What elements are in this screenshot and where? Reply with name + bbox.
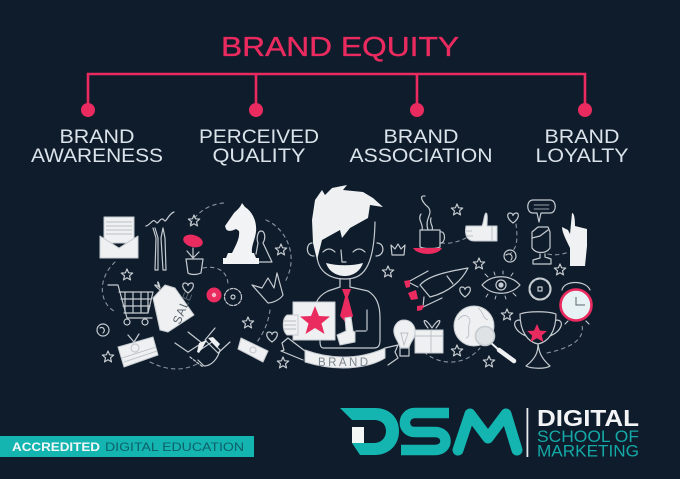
logo wordmark: SCHOOL OF [537,428,639,446]
logo: DSM [340,405,639,460]
dashed connectors [102,203,582,369]
icon: handshake [175,328,230,367]
label: brand loyalty: BRAND [544,127,620,148]
man left hand [283,315,298,335]
logo divider [526,408,528,457]
label: brand association [350,127,492,167]
icon: coffee cup [413,196,444,254]
icon: eye [482,271,520,299]
label: brand awareness [31,127,163,167]
icon: person bust [532,227,551,264]
logo wordmark: MARKETING [537,442,639,460]
icon: envelope [100,217,138,258]
icon: light bulb [394,320,415,356]
logo wordmark [537,405,639,460]
banner: accredited digital education [0,436,254,457]
man head [307,222,383,279]
label: brand association: BRAND [384,127,458,148]
label: brand association: ASSOCIATION [350,146,492,167]
icon: sale tag [153,282,195,332]
icon: money stack [118,334,158,367]
label: perceived quality: PERCEIVED [199,127,319,148]
icon: banknote [238,338,268,362]
man hair [312,185,383,260]
label: brand awareness: AWARENESS [31,146,163,167]
brand card [293,302,335,340]
icon: chess knight [223,203,272,264]
logo white notch [352,427,364,443]
icon: small ball [504,250,516,262]
banner: accredited digital education: ACCREDITED [12,440,100,454]
icon: small coin [97,324,109,336]
man tie [340,289,353,324]
icon: shopping cart [108,285,153,325]
banner: accredited digital education: DIGITAL EDUCATION [105,440,244,454]
logo letter D [340,408,399,455]
label: brand awareness: BRAND [60,127,134,148]
brand ribbon: BRAND [318,357,368,369]
small hearts [183,213,518,342]
title: BRAND EQUITY [221,31,459,62]
icon: flower pot [182,233,204,274]
man body [316,279,380,348]
brand ribbon [281,338,398,369]
label: perceived quality: QUALITY [212,146,306,167]
icon: speech bubble [528,200,555,222]
icon: alarm clock [560,282,592,324]
tree connector [81,74,592,117]
label: perceived quality [199,127,319,167]
icon: crown [252,273,283,303]
logo wordmark: DIGITAL [537,405,639,431]
label: brand loyalty [536,127,629,167]
logo letter S [401,413,449,450]
man mouth [326,263,363,276]
icon: globe and magnifier [454,306,514,361]
icon: sale tag: SALE [170,289,195,326]
icon: small crown [391,244,405,255]
icon: pointing hand [562,213,587,266]
icon: logo brushes [146,212,174,270]
logo letter M [458,414,517,450]
man thumb up [337,317,355,345]
icon: trophy [515,312,561,368]
icon: gift box [415,320,443,353]
icon: thumbs up [465,213,497,241]
label: brand loyalty: LOYALTY [536,146,629,167]
icon: rocket [404,268,468,311]
icon: gear [530,278,550,300]
small stars [102,204,566,368]
figure: brand man [281,185,398,369]
icon: gears [206,288,242,306]
